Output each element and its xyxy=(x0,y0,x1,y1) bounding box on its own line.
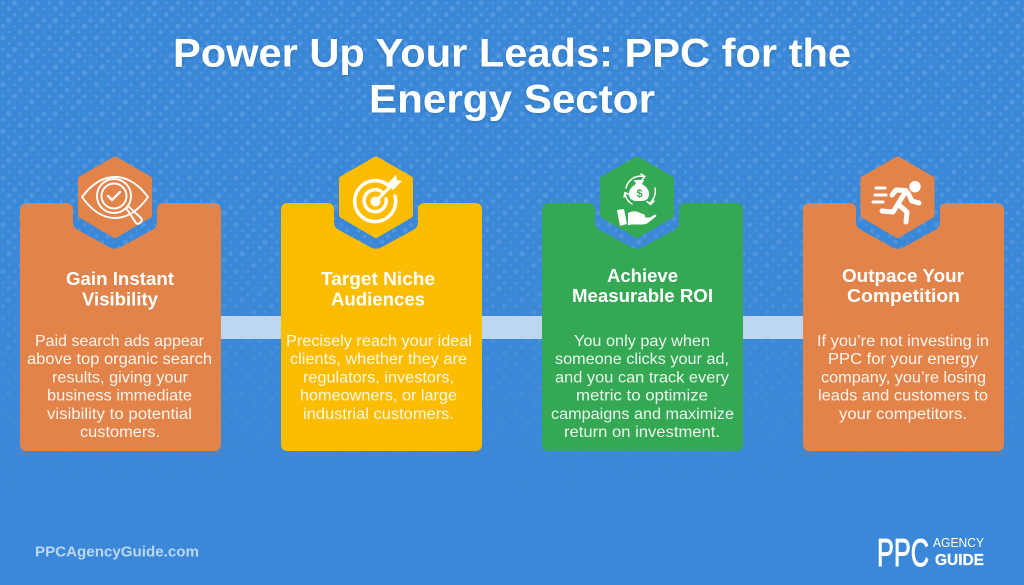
heading: Achieve xyxy=(607,265,678,286)
logo: PPC xyxy=(877,532,929,575)
body text: leads and customers to xyxy=(818,388,988,405)
body text: clients, whether they are xyxy=(290,351,467,368)
heading xyxy=(321,268,435,310)
body text xyxy=(27,333,212,441)
body text: return on investment. xyxy=(564,424,720,441)
body text: industrial customers. xyxy=(303,406,454,423)
icon: money bag and hand: $ xyxy=(636,188,643,200)
hexagon badge xyxy=(342,160,410,235)
title: Energy Sector xyxy=(369,78,655,122)
footer website: PPCAgencyGuide.com xyxy=(35,544,199,560)
body text: regulators, investors, xyxy=(303,369,454,386)
icon: money bag and hand xyxy=(617,174,656,226)
panel: target niche audiences xyxy=(281,160,482,451)
heading: Outpace Your xyxy=(842,265,964,286)
body text: Paid search ads appear xyxy=(35,333,204,350)
heading xyxy=(66,268,174,310)
body text: PPC for your energy xyxy=(828,351,978,368)
heading: Competition xyxy=(847,285,960,306)
hexagon badge xyxy=(603,160,671,235)
body text: above top organic search xyxy=(27,351,212,368)
logo: GUIDE xyxy=(935,552,984,569)
heading: Gain Instant xyxy=(66,268,174,289)
heading: Visibility xyxy=(82,288,159,310)
hexagon badge xyxy=(81,160,149,235)
body text: company, you’re losing xyxy=(821,369,986,386)
body text: results, giving your xyxy=(52,369,188,386)
body text: campaigns and maximize xyxy=(551,406,734,423)
body text: If you’re not investing in xyxy=(817,333,989,350)
heading: Target Niche xyxy=(321,268,435,289)
icon: target with arrow xyxy=(355,175,402,222)
logo: AGENCY xyxy=(933,536,985,550)
heading xyxy=(842,265,964,306)
body text xyxy=(551,333,734,441)
panel: achieve measurable roi xyxy=(542,160,743,451)
background xyxy=(0,0,1024,378)
body text: homeowners, or large xyxy=(300,388,457,405)
connector bars xyxy=(221,316,803,339)
body text: and you can track every xyxy=(555,369,729,386)
panel: outpace your competition xyxy=(803,160,1004,451)
body text: metric to optimize xyxy=(576,388,708,405)
body text: your competitors. xyxy=(839,406,967,423)
title: Power Up Your Leads: PPC for the xyxy=(173,32,851,76)
body text xyxy=(286,333,472,423)
body text: Precisely reach your ideal xyxy=(286,333,472,350)
body text: someone clicks your ad, xyxy=(555,351,729,368)
title xyxy=(173,32,851,122)
heading: Measurable ROI xyxy=(572,285,713,306)
heading: Audiences xyxy=(331,288,425,310)
icon: running person xyxy=(873,181,921,222)
body text xyxy=(817,333,989,423)
body text: visibility to potential xyxy=(47,406,192,423)
body text: business immediate xyxy=(47,388,192,405)
hexagon badge xyxy=(864,160,932,235)
body text: customers. xyxy=(80,424,160,441)
body text: You only pay when xyxy=(574,333,710,350)
heading xyxy=(572,265,713,306)
icon: eye with magnifier xyxy=(82,177,148,224)
panel: gain instant visibility xyxy=(20,160,221,451)
